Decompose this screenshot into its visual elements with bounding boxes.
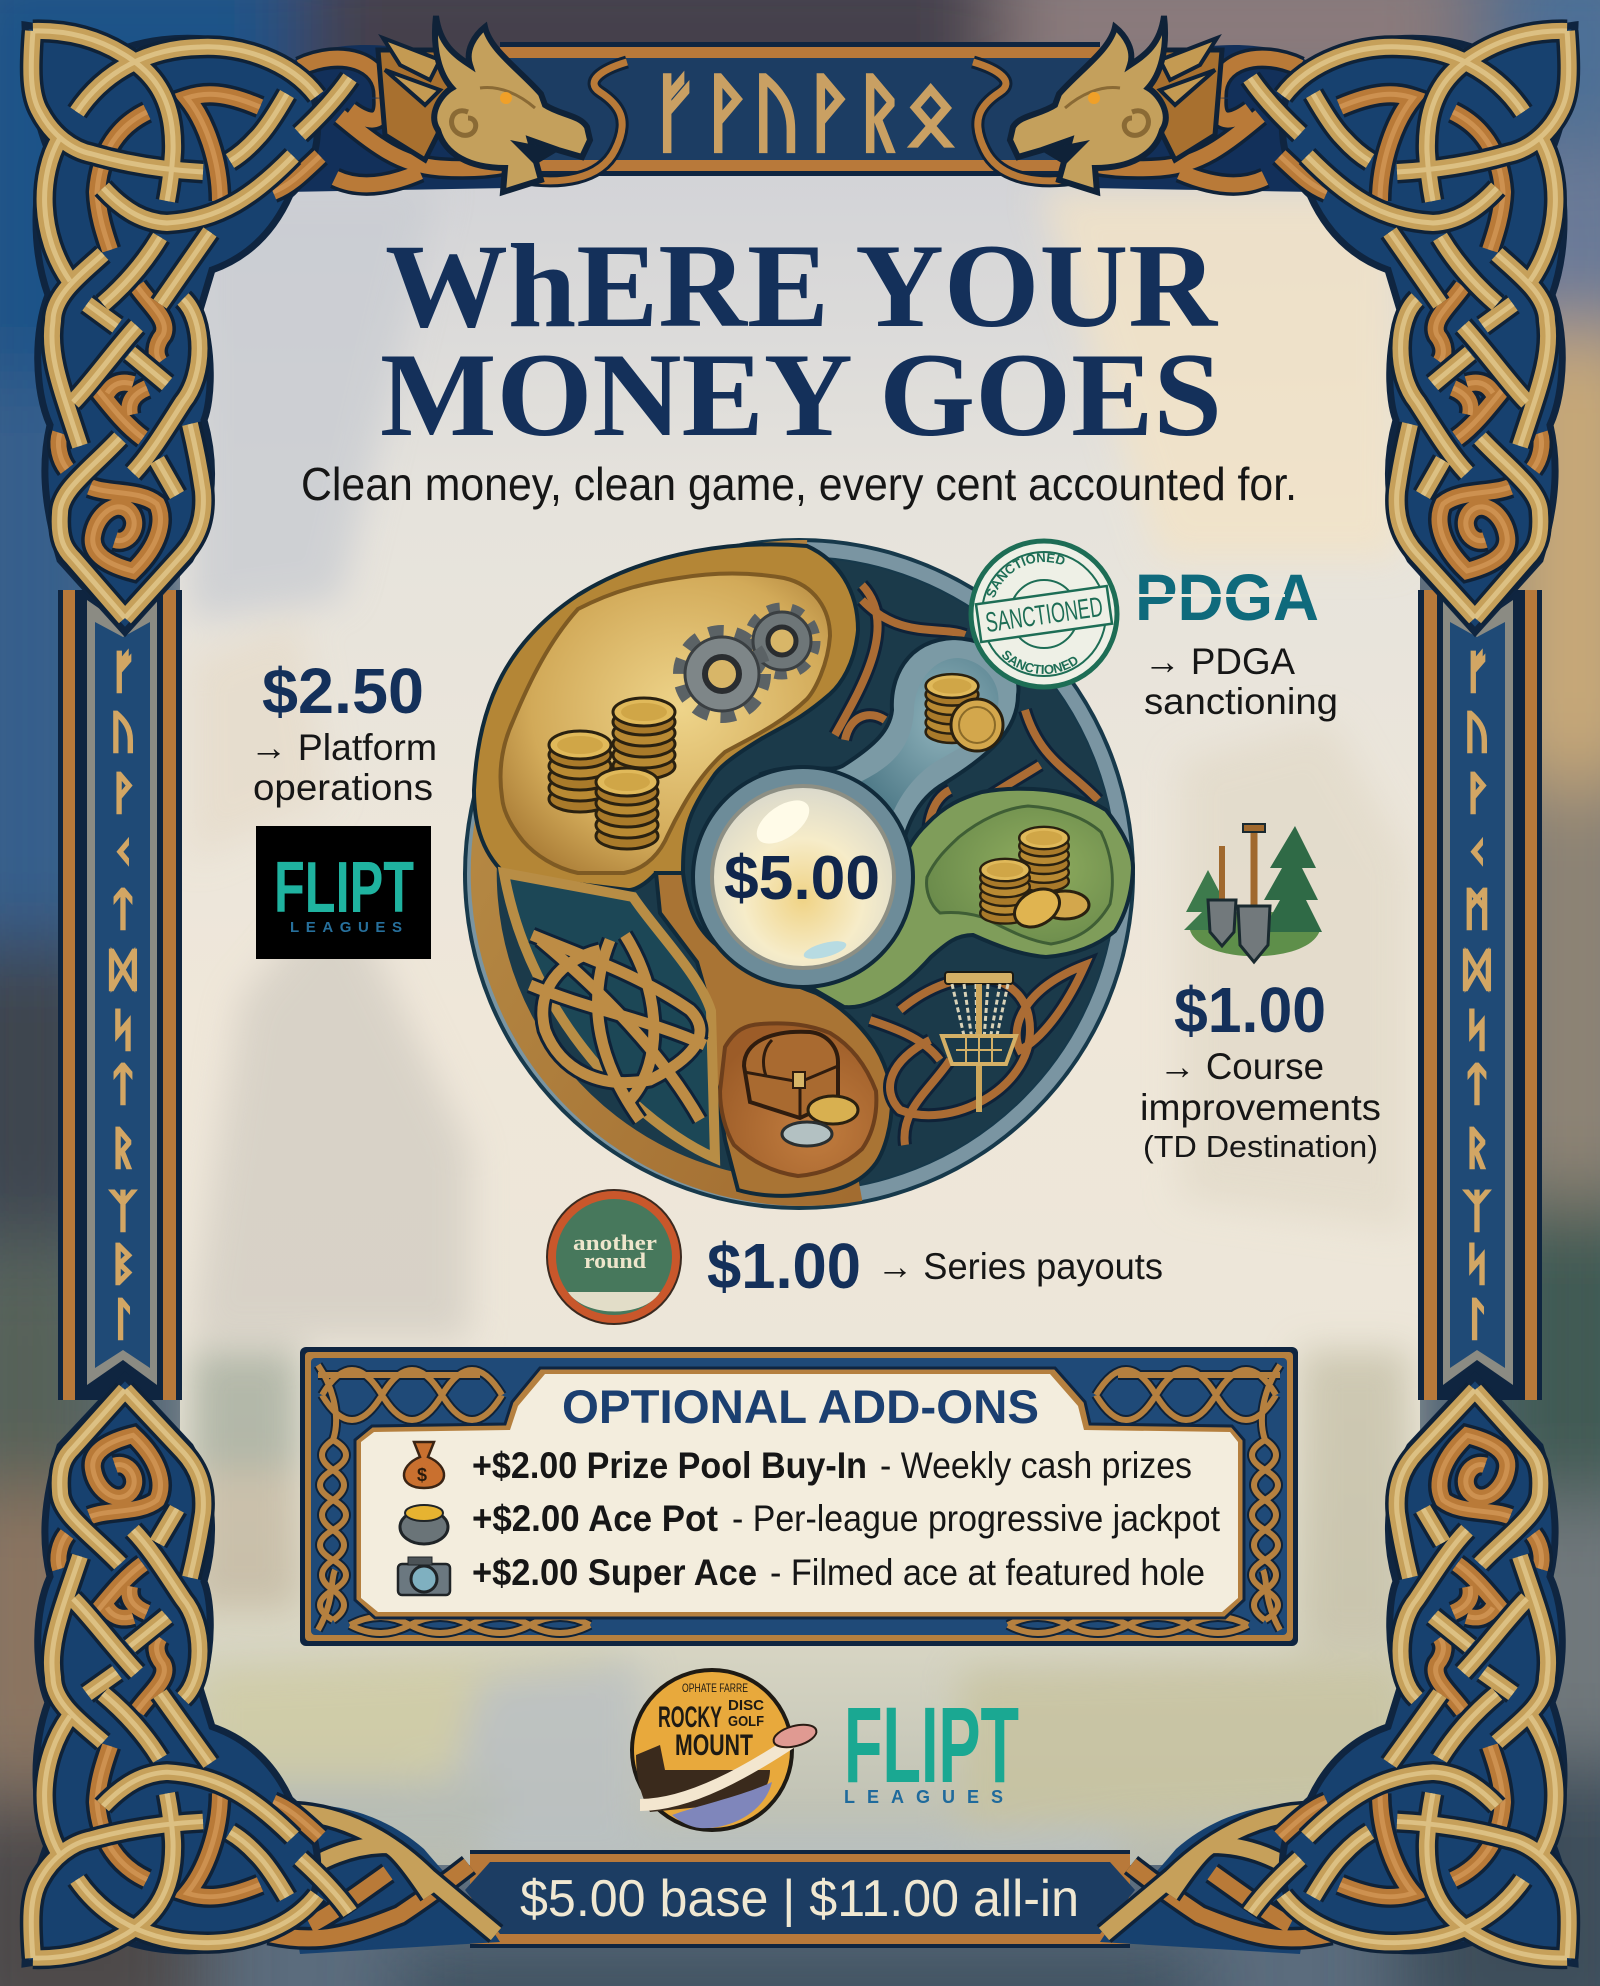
right runes: ᛏ [1464,1059,1490,1110]
icon: gears [679,608,815,717]
logo: FLIPT leagues teal: FLIPT [844,1684,1019,1805]
label: PDGA sanctioning [1135,560,1338,722]
left runes: ᚢ [110,707,136,758]
pearl with $5.00 [693,767,913,987]
logo: FLIPT leagues teal [844,1684,1019,1807]
logo: FLIPT leagues black: LEAGUES [290,919,402,936]
right runes: ᛋ [1464,1005,1490,1056]
icon: pot of gold [400,1505,448,1544]
corner: top left [25,25,350,632]
logo: FLIPT leagues black [256,826,431,959]
icon: gold coins [549,698,675,849]
label: series payouts [707,1230,1163,1302]
logo: FLIPT leagues teal: LEAGUES [844,1787,1003,1807]
icon: shovels and trees [1184,824,1322,962]
logo: Rocky Mount disc golf: GOLF [728,1713,764,1730]
logo: another round: round [584,1248,646,1273]
icon: treasure chest [744,1032,838,1118]
left runes: ᛋ [110,1005,136,1056]
label: platform operations: operations [253,767,433,808]
right runes: ᚲ [1464,827,1490,878]
knotwork lower right with disc basket [870,965,1085,1145]
central wheel [463,538,1135,1210]
left runes: ᚲ [110,827,136,878]
left runes: ᚠ [110,647,136,698]
logo: FLIPT leagues black: FLIPT [274,848,414,928]
knots left [318,1365,590,1633]
right runes [1464,647,1490,1345]
right runes: ᛚ [1464,1294,1490,1345]
label: PDGA sanctioning: sanctioning [1144,681,1338,722]
left runes [110,647,136,1345]
logo: Rocky Mount disc golf [632,1670,819,1830]
swirl: bronze [656,873,892,1196]
label: course improvements [1140,974,1381,1164]
swirl: green [789,789,1133,1007]
left runes: ᛒ [110,1239,136,1290]
label: PDGA sanctioning: → PDGA [1144,641,1295,682]
sanctioned stamp [968,538,1120,690]
pearl with $5.00: $5.00 [724,844,880,913]
icon: blue section coins [926,674,1003,751]
right runes: ᚱ [1464,1123,1490,1174]
bottom total banner [465,1850,1135,1948]
subtitle: Clean money, clean game, every cent accounted for. [301,458,1297,510]
label: platform operations: → Platform [250,727,437,768]
total text: $5.00 base | $11.00 all-in [520,1870,1079,1928]
logo: another round [547,1190,681,1324]
sanctioned stamp: SANCTIONED [983,591,1105,638]
icon: money bag [404,1442,444,1488]
title: WhERE YOUR [385,219,1218,352]
left runes: ᛏ [110,884,136,935]
left runes: ᛉ [110,1186,136,1237]
icon: disc golf basket [942,972,1016,1112]
right runes: ᚹ [1464,768,1490,819]
add-on row 2: +$2.00 Ace Pot [472,1498,718,1539]
left runes: ᚹ [110,768,136,819]
panel: optional add-ons [300,1347,1298,1646]
label: course improvements: $1.00 [1174,974,1326,1046]
add-on row 1: +$2.00 Prize Pool Buy-In [472,1445,867,1486]
right runes: ᚠ [1464,647,1490,698]
sanctioned stamp: SANCTIONED [986,553,1065,598]
logo: Rocky Mount disc golf: DISC [728,1697,764,1714]
dragon left [378,16,627,192]
label: platform operations [250,655,437,808]
knot extension: bottom right [1100,1805,1331,1954]
dragon heads [378,16,1222,192]
knot extension: top left [285,45,510,192]
right rune band [1418,590,1542,1400]
left runes: ᛏ [110,1059,136,1110]
left runes: ᛞ [110,945,136,996]
label: platform operations: $2.50 [262,655,424,727]
corner: bottom right [1250,1376,1575,1964]
label: course improvements: → Course [1159,1046,1324,1087]
sanctioned stamp: SANCTIONED [1002,650,1078,674]
rim: bronze [484,553,860,1193]
right runes: ᛋ [1464,1239,1490,1290]
icon: money bag: $ [417,1465,427,1485]
title [380,219,1222,461]
add-on row 3: +$2.00 Super Ace [472,1552,757,1593]
label: course improvements: improvements [1140,1087,1381,1128]
corner: top right [1250,25,1575,632]
icon: camera [398,1557,450,1595]
add-ons heading: OPTIONAL ADD-ONS [562,1380,1039,1433]
left runes: ᚱ [110,1123,136,1174]
label: PDGA sanctioning: PDGA [1135,560,1319,634]
icon: green section coins [980,827,1089,935]
label: series payouts: $1.00 [707,1230,861,1302]
logo: Rocky Mount disc golf: MOUNT [675,1729,753,1762]
cream card [355,1368,1244,1618]
left runes: ᛚ [110,1294,136,1345]
icon: coin and disc [782,1096,858,1146]
add-on row 1: - Weekly cash prizes [880,1445,1192,1486]
add-on row 3: - Filmed ace at featured hole [770,1552,1205,1593]
logo: Rocky Mount disc golf: ROCKY [658,1701,722,1734]
right runes: ᛗ [1464,884,1490,935]
right runes: ᚢ [1464,707,1490,758]
logo: Rocky Mount disc golf: OPHATE FARRE [682,1681,748,1695]
top rune banner [500,42,1100,176]
label: course improvements: (TD Destination) [1143,1129,1378,1164]
left rune band [58,590,182,1400]
banner runes: ᚠᚹᚢᚹᚱᛟ [649,64,956,162]
knot extension: top right [1090,45,1315,192]
label: series payouts: → Series payouts [877,1246,1163,1287]
swirl: steel blue [761,638,1018,870]
cream card inner [361,1374,1238,1612]
knot extension: bottom left [269,1805,500,1954]
knots right [1008,1365,1280,1633]
knotwork upper right [835,585,1098,850]
right runes: ᛞ [1464,945,1490,996]
title: MONEY GOES [380,328,1222,461]
right runes: ᛉ [1464,1186,1490,1237]
dragon right [973,16,1222,192]
knotwork lower left [504,873,715,1158]
cream centre panel [180,165,1420,1870]
add-on row 2: - Per-league progressive jackpot [732,1498,1221,1539]
corner: bottom left [25,1376,350,1964]
logo: another round: another [573,1230,657,1255]
swirl: gold [474,544,858,890]
